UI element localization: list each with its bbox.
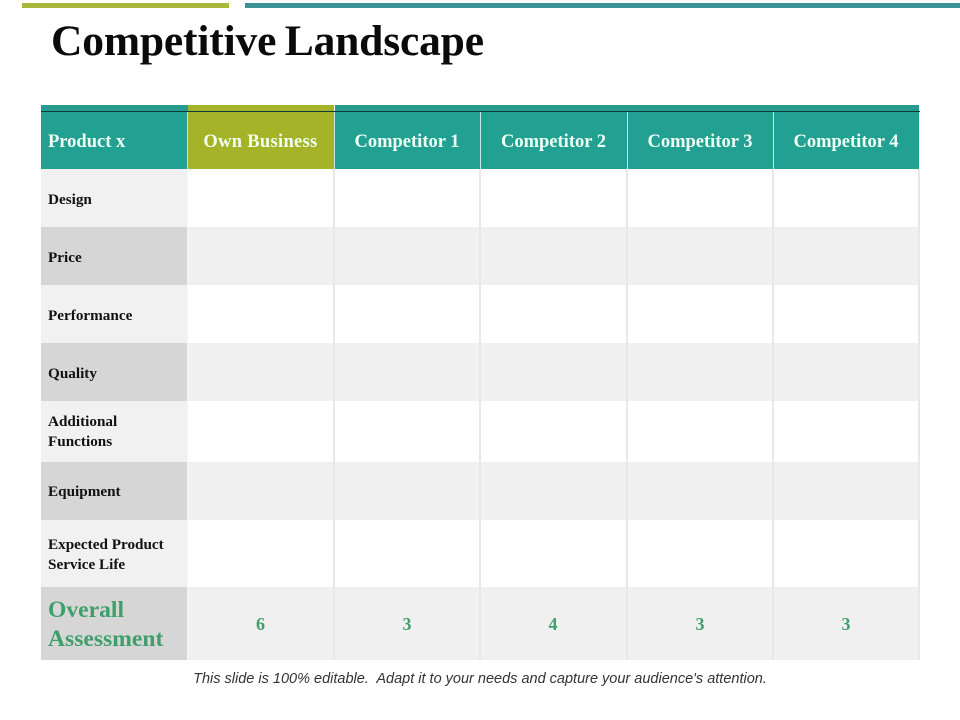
row band: equipment	[187, 462, 919, 520]
header label: competitor 4: Competitor 4	[794, 132, 898, 152]
header label: competitor 3: Competitor 3	[648, 132, 752, 152]
row label: performance	[41, 285, 187, 343]
top accent bar: teal	[245, 3, 960, 8]
header label: competitor 1: Competitor 1	[354, 132, 459, 152]
row label: design: Design	[48, 190, 92, 208]
row label: price	[41, 227, 187, 285]
row label: expected product service life	[41, 520, 187, 587]
header rule	[41, 111, 920, 112]
row label: overall assessment: Assessment	[48, 626, 163, 652]
comparison table	[41, 105, 920, 660]
score: competitor 3: 3	[696, 614, 704, 634]
row label: equipment: Equipment	[48, 483, 121, 500]
row label: overall assessment: Overall	[48, 596, 124, 622]
header accent band: own business	[188, 105, 334, 112]
score: competitor 4: 3	[842, 614, 850, 634]
header accent band: teal left	[41, 105, 188, 112]
row label: quality	[41, 343, 187, 401]
footer note: This slide is 100% editable. Adapt it to your needs and capture your audience's attention.	[193, 671, 767, 687]
row band: overall	[187, 587, 919, 660]
row label: performance: Performance	[48, 307, 132, 324]
header fill: own business	[188, 112, 334, 169]
score: competitor 1: 3	[402, 614, 412, 634]
score: own business: 6	[256, 614, 265, 634]
row label: additional functions	[41, 401, 187, 462]
header label: product: Product x	[48, 132, 125, 152]
header label: competitor 2: Competitor 2	[501, 132, 606, 152]
row band: price	[187, 227, 919, 285]
title: Competitive Landscape	[51, 17, 484, 65]
row label: quality: Quality	[48, 365, 97, 382]
row label: equipment	[41, 462, 187, 520]
row label: additional functions: Additional	[48, 413, 117, 430]
row label: expected product service life: Expected Product	[48, 536, 164, 552]
row label: price: Price	[48, 249, 82, 266]
row label: design	[41, 169, 187, 227]
score: competitor 2: 4	[548, 614, 558, 634]
top accent bar: green	[22, 3, 229, 8]
header accent band: teal right	[335, 105, 919, 112]
header label: own business: Own Business	[203, 132, 318, 152]
row label: overall assessment	[41, 587, 187, 660]
row label: additional functions: Functions	[48, 433, 112, 450]
row band: quality	[187, 343, 919, 401]
header fill: teal	[41, 112, 919, 169]
row label: expected product service life: Service Life	[48, 556, 125, 572]
